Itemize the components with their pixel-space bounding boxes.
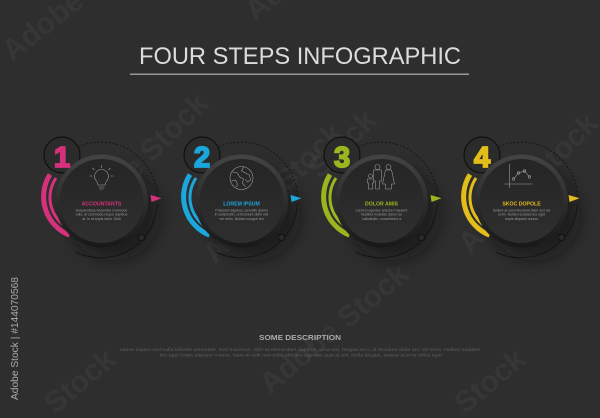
body text bbox=[493, 208, 551, 221]
watermarks: Adobe Stock bbox=[197, 117, 350, 270]
main disc bbox=[195, 154, 288, 248]
connector dashed and solid ring bbox=[216, 142, 298, 258]
main disc bbox=[55, 154, 148, 248]
body text: Laorem egestas artecta Praesent bbox=[356, 208, 407, 212]
main disc shadow bbox=[208, 168, 300, 260]
body text: sollicitudin, consectetur a bbox=[362, 217, 401, 221]
number badge ring bbox=[464, 137, 500, 173]
body text: Praesent dapibus convallis gravid bbox=[215, 208, 268, 212]
connector dashed and solid ring bbox=[496, 142, 578, 258]
description text: varius sapien sed nulla lobortis venenatis. Sed maximus, nibh at elementum dapibus, urna nisi, feugiat arcu, id tincidunt diam orci vel enim. Nullam sodales bbox=[120, 347, 481, 352]
colored arc bbox=[44, 175, 72, 235]
body text: turpis aliquam cursus bbox=[505, 217, 538, 221]
body text: ver enim. Nullam congue leo bbox=[219, 217, 264, 221]
number: 1 bbox=[54, 142, 70, 174]
icon: globe bbox=[230, 166, 253, 190]
number badge ring bbox=[44, 137, 80, 173]
number: 3 bbox=[334, 142, 350, 174]
number badge ring bbox=[324, 137, 360, 173]
watermarks: Stock bbox=[302, 104, 383, 185]
body text: at. In at turpis dolor. Duis bbox=[82, 217, 121, 221]
body text: Vestibul molestie ipsum eu bbox=[361, 213, 402, 217]
body text: odio, at commodo neque dapibus bbox=[76, 213, 128, 217]
stock id vertical text: Adobe Stock | #144070568 bbox=[10, 277, 21, 400]
step 4 bbox=[464, 137, 580, 260]
main disc shadow bbox=[348, 168, 440, 260]
heading: LOREM IPSUM bbox=[223, 202, 260, 208]
connector dashed and solid ring bbox=[356, 142, 438, 258]
colored arc bbox=[324, 175, 352, 235]
description text bbox=[120, 347, 481, 358]
main disc shadow bbox=[488, 168, 580, 260]
icon: light bulb bbox=[90, 165, 114, 189]
main disc bbox=[475, 154, 568, 248]
main disc bbox=[335, 154, 428, 248]
icon: family bbox=[368, 164, 394, 189]
description heading: SOME DESCRIPTION bbox=[259, 333, 341, 342]
body text: in sollicitudin, ut tincidunt diam nisi bbox=[215, 213, 268, 217]
title rule bbox=[130, 74, 469, 75]
body text: Sollent at cursl tincidunt diam orci vel bbox=[493, 208, 551, 212]
pointer arrow bbox=[290, 195, 302, 202]
heading: DOLOR AMIS bbox=[365, 202, 399, 208]
body text bbox=[215, 208, 268, 221]
pointer arrow bbox=[430, 195, 442, 202]
pointer arrow bbox=[150, 195, 162, 202]
body text bbox=[356, 208, 407, 221]
body text: Suspendisse imperdiet commodo bbox=[76, 208, 127, 212]
heading: ACCOUNTANTS bbox=[82, 202, 122, 208]
step 2 bbox=[184, 137, 302, 260]
icon: line chart bbox=[504, 164, 532, 188]
step 1 bbox=[44, 137, 162, 260]
body text: enim. Nullam sodales leo eget bbox=[498, 213, 545, 217]
description text: leo eget turpis aliquam cursus. Nam at velit non nulla ultricies egestas quis at ant. Nulla feugiat, massa at eros tellus eget bbox=[160, 352, 443, 358]
step 3 bbox=[324, 137, 442, 260]
body text bbox=[76, 208, 128, 221]
heading: SKOC DOPOLE bbox=[502, 202, 541, 208]
number badge ring bbox=[184, 137, 220, 173]
number: 2 bbox=[194, 142, 210, 174]
colored arc bbox=[464, 175, 492, 235]
number: 4 bbox=[474, 142, 490, 174]
title: FOUR STEPS INFOGRAPHIC bbox=[139, 43, 461, 70]
connector dashed and solid ring bbox=[76, 142, 158, 258]
watermarks: Adobe Stock bbox=[253, 257, 415, 400]
watermarks: Adobe Stock bbox=[62, 87, 215, 240]
pointer arrow bbox=[568, 195, 580, 202]
colored arc bbox=[184, 175, 212, 235]
main disc shadow bbox=[68, 168, 160, 260]
